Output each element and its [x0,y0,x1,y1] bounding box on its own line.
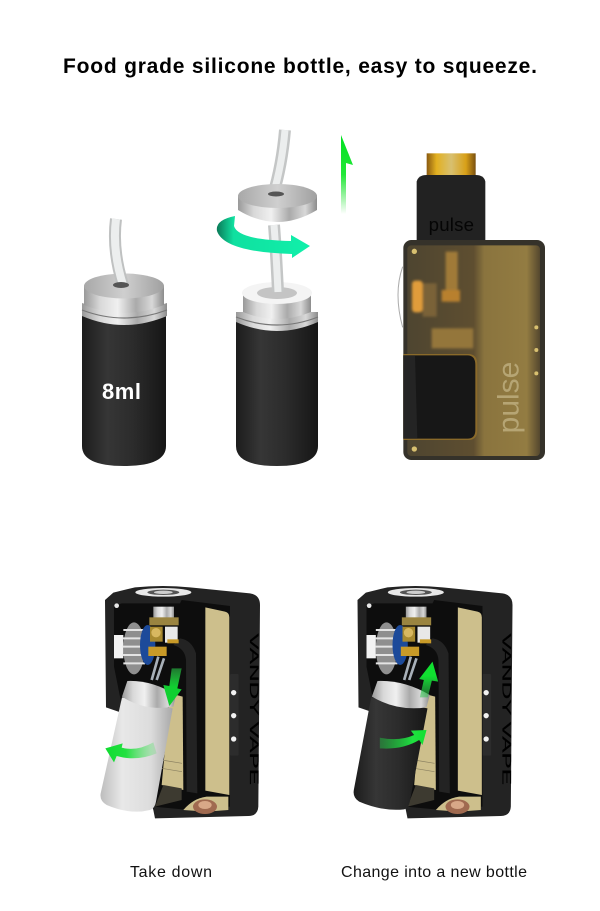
atomizer logo: pulse [429,214,474,235]
title: Food grade silicone bottle, easy to squeeze. [63,55,537,78]
black atomizer [417,175,485,242]
body [403,240,545,460]
caption: take down: Take down [130,864,212,881]
rotation arrow [217,216,310,258]
internals [412,252,473,348]
arrow left [105,742,157,762]
gold drip tip [427,153,476,177]
screws [412,249,417,254]
side button [398,267,403,327]
arrow down [163,668,182,706]
straw [115,219,123,285]
black bottle [354,697,427,810]
straw upper [273,130,285,195]
arrow curved right [380,730,426,749]
device right: new bottle [354,586,513,818]
caption: change bottle: Change into a new bottle [341,864,527,881]
bottle with cap lifted [236,130,318,466]
capacity label: 8ml [102,379,141,404]
white bottle [100,697,173,812]
bottle with cap: 8ml [82,219,167,466]
lifted cap [238,196,317,222]
straw lower [274,225,278,292]
bottle window [403,354,477,440]
arrow up [419,662,438,697]
arrow up [341,135,353,214]
assembled device with tank [398,153,545,460]
body logo: pulse [492,362,525,433]
device left: take down [100,586,261,818]
